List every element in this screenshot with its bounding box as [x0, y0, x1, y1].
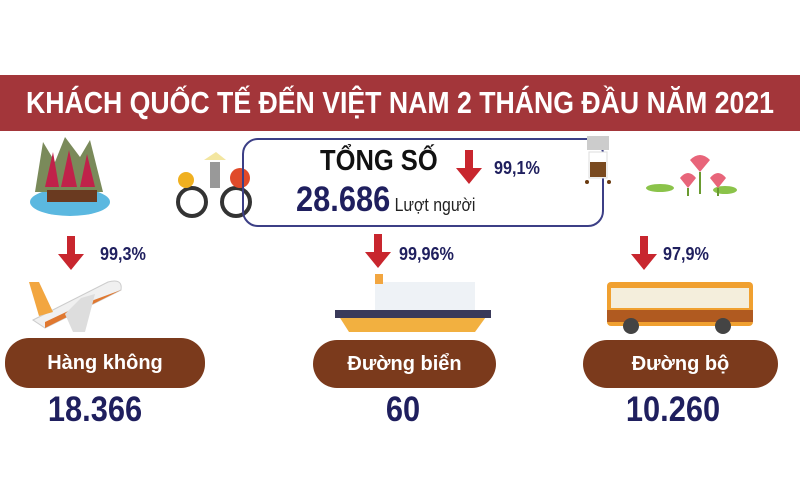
heading: total: TỔNG SỐ	[320, 145, 438, 177]
icon: arrow air	[58, 236, 84, 270]
pill: road: Đường bộ	[632, 352, 729, 374]
icon: bicycle vendor	[176, 152, 252, 218]
value: sea: 60	[386, 390, 420, 429]
pill: sea: Đường biển	[347, 352, 462, 374]
icon: arrow road	[631, 236, 657, 270]
pct: total: 99,1%	[494, 158, 540, 178]
pct: sea: 99,96%	[399, 244, 454, 264]
value: air: 18.366	[48, 390, 142, 429]
pill: sea	[313, 340, 496, 388]
panel: total	[242, 138, 604, 227]
total value: 28.686 Lượt người	[296, 180, 475, 219]
column: sea	[313, 234, 496, 429]
icon: bus	[607, 282, 753, 334]
pct: air: 99,3%	[100, 244, 146, 264]
icon: ha long bay	[30, 137, 110, 216]
icon: lotus	[646, 155, 737, 196]
title banner	[0, 75, 800, 131]
pill: air	[5, 338, 205, 388]
value: road: 10.260	[626, 390, 720, 429]
icon: arrow sea	[365, 234, 391, 268]
pct: road: 97,9%	[663, 244, 709, 264]
column: road	[583, 236, 778, 429]
icon: down arrow total	[456, 150, 482, 184]
icon: coffee	[585, 136, 611, 184]
icon: airplane	[29, 280, 122, 332]
pill: air: Hàng không	[47, 352, 163, 374]
title text: KHÁCH QUỐC TẾ ĐẾN VIỆT NAM 2 THÁNG ĐẦU NĂM 2021	[26, 85, 774, 120]
pill: road	[583, 340, 778, 388]
column: air	[5, 236, 205, 429]
icon: ship	[335, 274, 491, 332]
